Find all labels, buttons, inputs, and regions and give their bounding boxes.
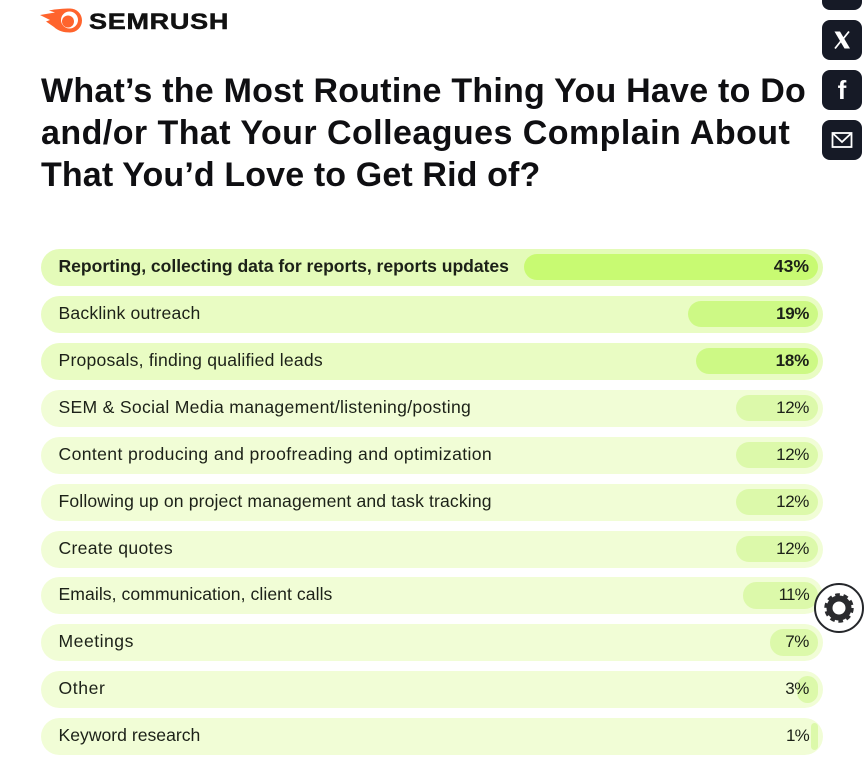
bar: Keyword research 1%: 1% — [786, 726, 809, 745]
icon: email envelope — [822, 120, 862, 160]
bar: Backlink outreach 19%: 19% — [776, 304, 809, 322]
bar: Project management 12%: Following up on project management and task tracking — [58, 490, 492, 510]
bar: Content 12%: 12% — [776, 444, 809, 464]
bar: Backlink outreach 19%: Backlink outreach — [58, 302, 200, 322]
bar: Other 3%: Other — [58, 678, 106, 698]
bar: Proposals 18%: Proposals, finding qualified leads — [58, 350, 323, 370]
bar: Reporting 43% — [41, 248, 823, 286]
bar: Other 3% — [41, 671, 823, 708]
logo wordmark: SEMRUSH — [89, 9, 229, 34]
bar: Proposals 18% — [41, 342, 823, 380]
bar: Meetings 7%: 7% — [785, 632, 809, 651]
bar: Create quotes 12% — [41, 530, 823, 568]
bar: Proposals 18%: 18% — [776, 350, 809, 370]
title: That You’d Love to Get Rid of? — [41, 156, 540, 194]
bar: Reporting 43%: Reporting, collecting data for reports, reports updates — [58, 256, 509, 276]
bar: Other 3%: 3% — [785, 679, 809, 698]
title: and/or That Your Colleagues Complain About — [41, 114, 790, 152]
bar: Content 12%: Content producing and proofreading and optimization — [58, 444, 492, 464]
bar: SEM and Social 12% — [41, 390, 823, 426]
icon: Facebook — [822, 70, 862, 110]
bar: Meetings 7% — [41, 624, 823, 661]
title: What’s the Most Routine Thing You Have to Do — [41, 72, 806, 110]
icon: settings gear — [814, 583, 864, 633]
bar: Keyword research 1%: Keyword research — [58, 725, 200, 745]
bar: SEM and Social 12%: SEM & Social Media management/listening/posting — [58, 396, 471, 416]
bar: Content 12% — [41, 436, 823, 474]
bar: Emails 11%: Emails, communication, client calls — [58, 584, 332, 604]
icon: partial share button — [822, 0, 862, 10]
bar: Reporting 43%: 43% — [774, 256, 809, 276]
title — [41, 72, 806, 194]
icon: orange fireball — [40, 8, 82, 32]
bar: Project management 12%: 12% — [776, 492, 809, 510]
bar: Create quotes 12%: 12% — [776, 538, 809, 558]
bar: Meetings 7%: Meetings — [58, 631, 134, 651]
icon: Facebook: f — [838, 75, 846, 105]
icon: X — [822, 20, 862, 60]
bar: Project management 12% — [41, 484, 823, 520]
bar: Create quotes 12%: Create quotes — [58, 538, 173, 558]
social buttons — [822, 0, 862, 160]
bar: Emails 11%: 11% — [779, 585, 809, 604]
bar: Emails 11% — [41, 577, 823, 614]
bar: SEM and Social 12%: 12% — [776, 398, 809, 416]
logo: Semrush — [40, 8, 229, 34]
bar chart — [41, 249, 823, 755]
bar: Backlink outreach 19% — [41, 296, 823, 332]
bar: Keyword research 1% — [41, 718, 823, 755]
